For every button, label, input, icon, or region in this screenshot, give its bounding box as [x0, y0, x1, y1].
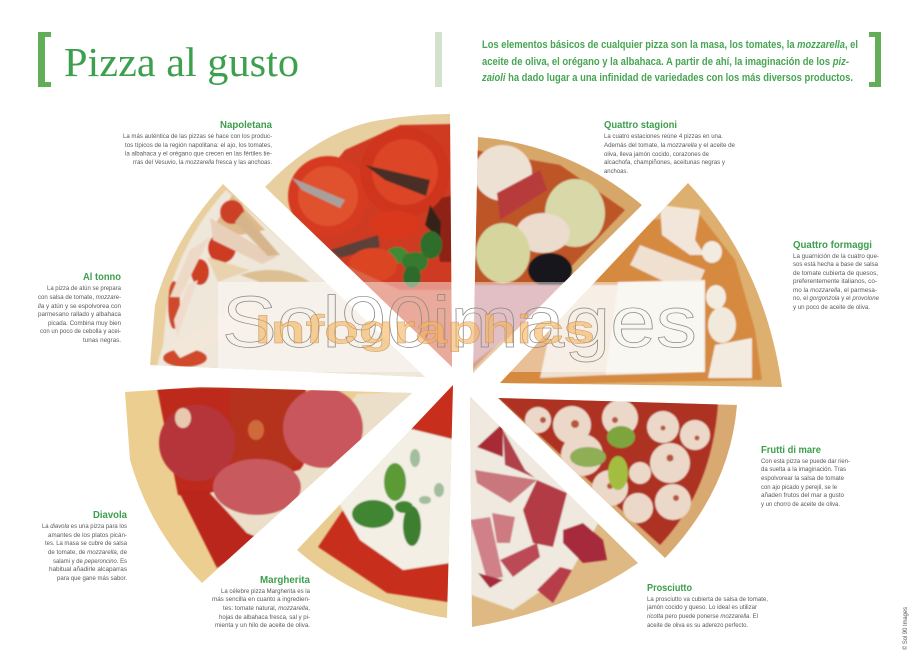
header: left bracket — [38, 32, 51, 87]
text block: Prosciutto: aceite de oliva es su aderezo perfecto. — [647, 622, 748, 629]
text block: Diavola: salami y de peperoncino. Es — [53, 558, 127, 565]
text block: Quattro stagioni: anchoas. — [604, 168, 628, 175]
pizza slice: Frutti di mare — [495, 395, 740, 560]
intro paragraph: Los elementos básicos de cualquier pizza son la masa, los tomates, la mozzarella, el — [482, 39, 858, 51]
text block: Quattro stagioni: alcachofa, champiñones, aceitunas negras y — [604, 159, 726, 166]
text block: Margherita: mienta y un hilo de aceite de oliva. — [215, 622, 310, 629]
text block: Diavola: La diavola es una pizza para los — [42, 523, 127, 530]
text block: Quattro formaggi — [793, 239, 879, 311]
text block: Prosciutto: La prosciutto va cubierta de salsa de tomate, — [647, 596, 768, 603]
intro paragraph: zaioli ha dado lugar a una infinidad de variedades con los más diversos productos. — [481, 72, 853, 84]
text block: Quattro stagioni: oliva, lleva jamón cocido, corazones de — [604, 151, 709, 158]
text block: Quattro formaggi: y un poco de aceite de oliva. — [793, 304, 870, 311]
text block: Quattro formaggi: Quattro formaggi — [793, 239, 872, 251]
title: Pizza al gusto — [64, 39, 299, 85]
text block: Al tonno: parmesano rallado y albahaca — [38, 311, 121, 318]
text block: Quattro formaggi: mo la mozzarella, el parmesa- — [793, 287, 877, 294]
text block: Al tonno: picada. Combina muy bien — [48, 320, 121, 327]
text block: Napoletana — [123, 119, 272, 166]
text block: Al tonno: con salsa de tomate, mozzare- — [38, 294, 121, 301]
text block: Quattro formaggi: de tomate cubierta de quesos, — [793, 270, 878, 277]
text block: Napoletana: tos típicos de la región napolitana: el ajo, los tomates, — [125, 142, 272, 149]
intro paragraph: aceite de oliva, el orégano y la albahaca. A partir de ahí, la imaginación de los piz- — [482, 56, 849, 68]
text block: Quattro stagioni: La cuatro estaciones reúne 4 pizzas en una. — [604, 133, 723, 140]
text block: Diavola: habitual añadirle alcaparras — [49, 566, 127, 573]
watermark: Sol90images — [222, 283, 697, 363]
pizza slice: Quattro stagioni — [470, 135, 645, 375]
credit: © Sol 90 Images — [902, 607, 909, 650]
text block: Margherita: Margherita — [260, 574, 310, 586]
pizza slice: Margherita — [295, 380, 460, 620]
text block: Diavola: amantes de los platos picán- — [48, 532, 127, 539]
text block: Napoletana: la albahaca y el orégano que crecen en las fértiles tie- — [125, 150, 272, 158]
text block: Quattro formaggi: sos está hecha a base de salsa — [793, 261, 878, 268]
text block: Frutti di mare: da suelta a la imaginación. Tras — [761, 466, 846, 473]
header: right bracket — [869, 32, 881, 87]
text block: Napoletana: La más auténtica de las pizzas se hace con los produc- — [123, 133, 272, 140]
text block: Frutti di mare: Con esta pizza se puede dar rien- — [761, 458, 850, 465]
text block: Al tonno: lla y atún y se espolvorea con — [38, 303, 121, 310]
text block: Frutti di mare: y un chorro de aceite de oliva. — [761, 501, 840, 508]
text block: Al tonno — [38, 271, 121, 344]
pizza slice: Napoletana — [260, 110, 455, 370]
text block: Quattro stagioni: Además del tomate, la mozzarella y el aceite de — [604, 142, 735, 149]
header divider — [435, 32, 442, 87]
text block: Margherita: tes: tomate natural, mozzarella, — [223, 605, 310, 612]
text block: Frutti di mare: añaden frutos del mar a gusto — [761, 492, 844, 499]
text block: Quattro stagioni — [604, 119, 735, 175]
text block: Prosciutto: Prosciutto — [647, 582, 692, 594]
text block: Quattro formaggi: preferentemente italianos, co- — [793, 278, 877, 285]
text block: Quattro formaggi: La guarnición de la cuatro que- — [793, 253, 879, 260]
text block: Prosciutto: ricotta pero puede ponerse mozzarella. El — [647, 613, 758, 620]
text block: Diavola: para que gane más sabor. — [57, 575, 127, 582]
pizza slice: Diavola — [120, 385, 415, 585]
text block: Margherita: más sencilla en cuanto a ingredien- — [212, 596, 310, 603]
text block: Napoletana: rras del Vesuvio, la mozzarella fresca y las anchoas. — [133, 159, 272, 166]
pizza slice: Prosciutto — [465, 393, 640, 630]
text block: Frutti di mare: Frutti di mare — [761, 444, 821, 456]
intro paragraph — [481, 39, 858, 84]
text block: Al tonno: con un poco de cebolla y acei- — [40, 328, 121, 335]
text block: Diavola: tes. La masa se cubre de salsa — [45, 540, 127, 547]
text block: Napoletana: Napoletana — [220, 119, 272, 131]
text block: Margherita — [212, 574, 310, 629]
text block: Al tonno: Al tonno — [83, 271, 121, 283]
text block: Prosciutto: jamón cocido y queso. Lo ideal es utilizar — [646, 604, 758, 611]
text block: Diavola — [42, 509, 127, 582]
pizza slice: Al tonno — [150, 184, 425, 377]
text block: Al tonno: La pizza de atún se prepara — [47, 285, 121, 292]
text block: Margherita: hojas de albahaca fresca, sal y pi- — [219, 614, 310, 621]
text block: Diavola: de tomate, de mozzarella, de — [48, 549, 127, 556]
text block: Prosciutto — [646, 582, 768, 629]
text block: Al tonno: tunas negras. — [83, 337, 121, 344]
text block: Quattro stagioni: Quattro stagioni — [604, 119, 677, 131]
pizza slice: Quattro formaggi — [495, 180, 785, 390]
text block: Frutti di mare: espolvorear la salsa de tomate — [761, 475, 844, 482]
text block: Frutti di mare — [761, 444, 850, 508]
text block: Frutti di mare: con ajo picado y perejil, se le — [761, 484, 837, 491]
text block: Diavola: Diavola — [93, 509, 127, 521]
text block: Margherita: La célebre pizza Margherita es la — [221, 588, 310, 595]
text block: Quattro formaggi: no, el gorgonzola y el provolone — [793, 295, 879, 302]
watermark: Infographics — [255, 308, 595, 352]
